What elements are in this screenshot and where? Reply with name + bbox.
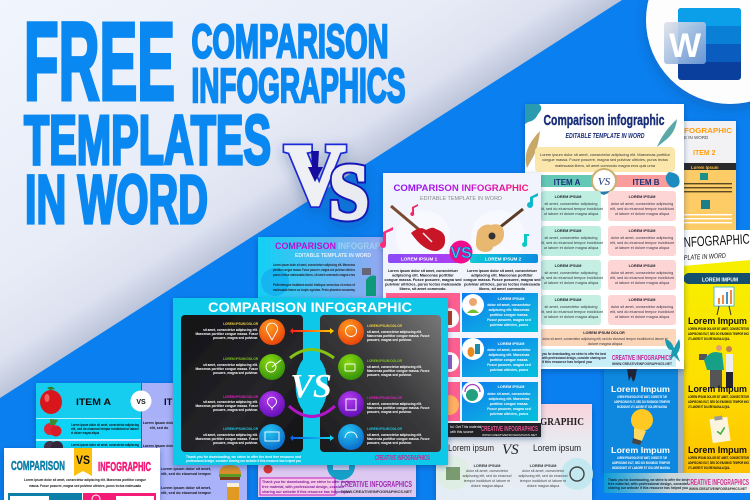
panel: cyan-purple template behind main card: Pellentesque habitant morbi tristique senectus et netus et (273, 283, 356, 287)
panel: white comparison infographic bottom-left: massa. Fusce posuere, magna sed pulvinar ultricies, purus lectus malesuada (29, 483, 142, 488)
right column text: posuere, magna sed pulvinar. (367, 441, 412, 445)
panel: item A versus item B table: elit, sed do eiusmod tempor incididunt ut labore (71, 427, 139, 431)
panel: pink VS template: Lorem ipsum (533, 443, 581, 453)
panel: orange item 2 template: E IN WORD (684, 135, 709, 140)
right column text: LOREM IPSUM DOLOR (367, 324, 403, 328)
icon: teal branch (657, 119, 677, 147)
panel: word document template with floral decoration: LOREM IPSUM (555, 229, 581, 233)
icon: guitars (462, 338, 484, 360)
left column text (195, 322, 259, 445)
panel: guitar comparison template: COMPARISON INFOGRAPHIC (394, 183, 529, 194)
text box: intro: congue massa. Fusce posuere, magna sed pulvinar ultricies, purus lectus (542, 157, 668, 162)
title: FREE COMPARISON INFOGRAPHICS TEMPLATES IN WORD: FREE (24, 0, 175, 124)
panel: guitar comparison template: pulvinar ultricies, purus lectus malesuada (464, 282, 541, 286)
panel: cyan-purple template behind main card: purus lectus malesuada libero, sit amet commodo magna eros (273, 273, 355, 277)
icon: strawberries (44, 419, 62, 436)
panel: word document template with floral decoration: LOREM IPSUM (555, 298, 581, 302)
panel: pink VS template: VS (502, 442, 519, 458)
footer: card note and logo: CREATIVE INFOGRAPHICS (375, 453, 430, 462)
icon: music notes (380, 193, 538, 248)
panel: yellow template: Lorem Impum (688, 316, 747, 326)
icons: right circles (338, 319, 364, 450)
title: FREE COMPARISON INFOGRAPHICS TEMPLATES IN WORD (24, 0, 406, 238)
footer: logo strip: CREATIVE INFOGRAPHICS (612, 353, 672, 362)
text box: peach footer: LOREM IPSUM DOLOR (583, 331, 625, 335)
icon: burger (219, 465, 241, 480)
panel: guitar comparison template: LOREM IPSUM (498, 297, 524, 301)
panel: guitar comparison template: Fusce posuere, magna sed (487, 318, 531, 322)
panel: guitar comparison template: adipiscing elit. Maecenas (489, 308, 529, 312)
footer: logo strip: with professional design, consider sharing our (541, 356, 607, 360)
panel: main black comparison card (173, 298, 448, 465)
right column text (367, 324, 430, 445)
title: FREE COMPARISON INFOGRAPHICS TEMPLATES IN WORD: COMPARISON (192, 14, 388, 68)
panel: word document template with floral decoration: ut labore et dolore magna aliqua (544, 212, 599, 216)
title: FREE COMPARISON INFOGRAPHICS TEMPLATES IN WORD: TEMPLATES (24, 101, 271, 179)
panel: word document template with floral decoration: elit, sed do eiusmod tempor incididunt (610, 276, 675, 280)
panel: word document template with floral decoration: ut labore et dolore magna aliqua (615, 281, 670, 285)
panel: word document template with floral decoration: Comparison infographic (544, 112, 664, 129)
panel: item A versus item B table: IT (164, 397, 173, 408)
panel: guitar comparison template: Lorem ipsum dolor sit amet, consectetuer (388, 269, 458, 273)
panel: blue template: Lorem Impum (611, 385, 670, 394)
left column text: LOREM IPSUM DOLOR (223, 427, 259, 431)
panel: item A versus item B table (36, 383, 247, 500)
panel: word document template with floral decoration: ut labore et dolore magna aliqua (544, 281, 599, 285)
panel: word document template with floral decoration: elit, sed do eiusmod tempor incididunt (610, 241, 675, 245)
arrow: top double arrow (290, 328, 334, 334)
panel: blue template: LOREM IPSUM DOLOR SIT AMET, CONSECTE TUR (617, 395, 667, 399)
panel: word document template with floral decoration: dolor sit amet, consectetur adipiscing (611, 305, 673, 309)
panel: item A versus item B table: ITEM A (76, 397, 111, 408)
panel: pink VS template: LOREM IPSUM (474, 464, 500, 468)
left column text: sit amet, consectetur adipiscing elit. (203, 433, 258, 437)
icons: left circles (259, 319, 285, 450)
panel: yellow template (683, 230, 750, 475)
panel: guitar comparison template: EDITABLE TEMPLATE IN WORD (420, 196, 502, 202)
left column text: posuere, magna sed pulvinar. (213, 441, 258, 445)
panel: cyan-purple template behind main card: sharing our website if this resource has helped you (262, 490, 350, 494)
panel: pink VS template (436, 404, 593, 500)
panel: item A versus item B table: elit, sed do (150, 426, 169, 430)
icon: Microsoft Word logo (664, 8, 741, 80)
panel: guitar comparison template: porttitor congue massa. (490, 402, 528, 406)
panel: word document template with floral decoration: sit amet, consectetur adipiscing (545, 202, 597, 206)
arc: purple (289, 406, 335, 416)
panel: word document template with floral decoration: elit, sed do eiusmod tempor incididunt (539, 310, 604, 314)
footer: card note and logo (186, 453, 430, 463)
footer: black logo strip (448, 423, 541, 437)
panel: guitar comparison template: adipiscing elit. Maecenas porttitor (392, 274, 454, 278)
panel: guitar comparison template: adipiscing elit. Maecenas (489, 353, 529, 357)
panel: guitar comparison template: LOREM IPSUM 2 (485, 256, 522, 262)
panel: pink VS template: adipiscing elit, sed do eiusmod (463, 474, 511, 478)
panel: cyan-purple template behind main card: Thank you for downloading, we strive to offer the best (262, 480, 355, 484)
left column text: Maecenas porttitor congue massa. Fusce (195, 437, 258, 441)
text box: intro (535, 147, 675, 172)
text box: peach footer: dolore magna aliqua (588, 342, 623, 346)
panel: guitar comparison template: adipiscing elit. Maecenas (489, 397, 529, 401)
panel: pink VS template: Lorem ipsum (448, 443, 494, 453)
panel: pink VS template: dolore magna aliqua (527, 484, 559, 488)
panel: pink VS template: dolore magna aliqua (471, 484, 503, 488)
left column text: sit amet, consectetur adipiscing elit. (203, 363, 258, 367)
icon: chart board (714, 287, 734, 315)
footer: black logo strip: WWW.CREATIVEINFOGRAPHICS.NET (482, 433, 537, 437)
icon: clipboard (709, 415, 731, 443)
panel: word document template with floral decoration: elit, sed do eiusmod tempor incididunt (610, 310, 675, 314)
right column text: LOREM IPSUM DOLOR (367, 427, 403, 431)
panel: pink VS template: tempor incididunt ut labore et (520, 479, 566, 483)
panel: word document template with floral decoration: sit amet, consectetur adipiscing (545, 305, 597, 309)
panel: cyan-purple template behind main card: porttitor congue massa. Fusce posuere, magna sed pulvinar ultricies (273, 268, 355, 272)
VS 3D emblem: V (285, 126, 345, 222)
panel: cyan-purple template behind main card: free material, with professional design, consider (262, 485, 345, 489)
text box: intro: malesuada libero, sit amet commodo magna eros quis urna (555, 163, 656, 168)
panel: orange item 2 template: ITEM 2 (693, 150, 716, 157)
panel: item A versus item B table: et dolore magna aliqua (71, 431, 100, 435)
panel: item A versus item B table: Lorem ipsum dolor sit amet, (161, 467, 211, 471)
panel: cyan-purple template behind main card: EDITABLE TEMPLATE IN WORD (295, 253, 371, 259)
panel: white comparison infographic bottom-left: Lorem ipsum dolor sit amet, consectetur adipiscing elit. Maecenas porttitor congue (24, 477, 147, 482)
VS 3D emblem: S (329, 148, 369, 235)
panel: word document template with floral decoration: LOREM IPSUM (629, 298, 655, 302)
footer: black logo strip: ful. Get This material (450, 425, 481, 429)
panel: pink VS template: GRAPHIC (540, 417, 584, 428)
right column text: LOREM IPSUM DOLOR (367, 359, 403, 363)
panel: word document template with floral decoration: elit, sed do eiusmod tempor incididunt (539, 241, 604, 245)
panel: guitar comparison template: congue massa. Fusce posuere, magna sed (384, 278, 462, 282)
VS 3D emblem: S (329, 148, 369, 235)
panel: word document template with floral decoration: dolor sit amet, consectetur adipiscing (611, 202, 673, 206)
right column text: sit amet, consectetur adipiscing elit. (367, 433, 422, 437)
panel: blue template: Lorem Impum (611, 446, 670, 455)
panel: item A versus item B table: elit, sed do eiusmod tempor (161, 491, 212, 495)
panel: word document template with floral decoration: sit amet, consectetur adipiscing (545, 271, 597, 275)
VS 3D emblem: V (285, 126, 345, 222)
panel: guitar comparison template: dolor sit amet, consectetur (487, 348, 531, 352)
right column text: sit amet, consectetur adipiscing elit. (367, 402, 422, 406)
panel: guitar comparison template: pulvinar ultricies, purus lectus malesuada (385, 282, 462, 286)
panel: guitar comparison template: congue massa. Fusce posuere, magna sed (463, 278, 541, 282)
panel: blue template: ADIPISCING ELIT, SED DO EIUSMOD TEMPOR (612, 461, 670, 465)
left column text: Maecenas porttitor congue massa. Fusce (195, 404, 258, 408)
footer: card note and logo: professional design, consider sharing our website if this resource has helped you (186, 459, 301, 463)
right column text: posuere, magna sed pulvinar. (367, 373, 412, 377)
right column text: Maecenas porttitor congue massa. Fusce (367, 406, 430, 410)
panel: guitar comparison template: LOREM IPSUM 1 (401, 256, 438, 262)
VS 3D emblem (285, 126, 369, 235)
panel: item A versus item B table: Lorem ipsum dolor (143, 421, 176, 425)
panel: cyan-purple template behind main card: Lorem ipsum dolor sit amet, consectetuer adipiscing elit. Maecenas (273, 263, 355, 267)
left column text: LOREM IPSUM DOLOR (223, 322, 259, 326)
icon: gold leaf (526, 131, 540, 168)
panel: word document template with floral decoration: LOREM IPSUM (629, 264, 655, 268)
panel: blue template: LOREM IPSUM DOLOR SIT AMET, CONSECTE TUR (617, 456, 667, 460)
badge: VS: VS (136, 399, 146, 406)
icon: two people (699, 345, 733, 388)
footer strip: blue and yellow templates: free material, with professional design, consider (608, 482, 689, 486)
heading: main card: COMPARISON INFOGRAPHIC (208, 299, 412, 315)
left column text: posuere, magna sed pulvinar. (213, 371, 258, 375)
panel: white comparison infographic bottom-left (4, 448, 160, 500)
left column text: Maecenas porttitor congue massa. Fusce (195, 367, 258, 371)
right column text: LOREM IPSUM DOLOR (367, 396, 403, 400)
panel: pink VS template: dolor sit amet, consectetur (522, 469, 565, 473)
icon: Microsoft Word logo: W (669, 27, 702, 65)
panel: guitar comparison template: dolor sit amet, consectetur (487, 303, 531, 307)
badge: floral VS: VS (598, 176, 611, 188)
panel: word document template with floral decoration: elit, sed do eiusmod tempor incididunt (539, 276, 604, 280)
badge: VS (450, 240, 472, 264)
panel: cyan-purple template behind main card: malesuada fames ac turpis egestas. Proin pharetra nonummy (273, 288, 355, 292)
right column text: Maecenas porttitor congue massa. Fusce (367, 437, 430, 441)
panel: guitar comparison template (380, 173, 541, 437)
panel: orange item 2 template (680, 121, 736, 236)
panel: yellow template: Lorem Impum (688, 384, 747, 394)
icon: teal flower top-left (525, 104, 541, 124)
panel: word document template with floral decoration: ut labore et dolore magna aliqua (615, 246, 670, 250)
panel: guitar comparison template: pulvinar ultricies, purus (490, 368, 528, 372)
panel: guitar comparison template: Lorem ipsum dolor sit amet, consectetuer (467, 269, 537, 273)
arc: green (290, 350, 334, 358)
text box: peach footer (541, 329, 676, 346)
panel: cyan-purple template behind main card: CREATIVE INFOGRAPHICS (341, 479, 412, 489)
panel: guitar comparison template: porttitor congue massa. (490, 358, 528, 362)
footer: logo strip (541, 349, 676, 367)
panel: yellow template: PLATE IN WORD (684, 253, 726, 262)
title: FREE COMPARISON INFOGRAPHICS TEMPLATES IN WORD: INFOGRAPHICS (192, 60, 406, 113)
panel: orange item 2 template: Lorem Ipsum (691, 165, 719, 170)
icon: acoustic guitar (476, 209, 523, 252)
panel: word document template with floral decoration: ut labore et dolore magna aliqua (615, 212, 670, 216)
text box: peach footer: dolor sit amet, consectetur adipiscing elit, sed do eiusmod tempor incididunt ut labore et (542, 337, 668, 341)
panel: yellow template: LOREM IMPUM (702, 278, 738, 284)
right column text: posuere, magna sed pulvinar. (367, 338, 412, 342)
panel: pink VS template: tempor incididunt ut labore et (464, 479, 510, 483)
icon: white circle behind Word logo (646, 0, 750, 104)
footer strip: blue and yellow templates: WWW.CREATIVEINFOGRAPHICS.NET (689, 487, 748, 491)
panel: word document template with floral decoration: LOREM IPSUM (629, 229, 655, 233)
panel: blue template: ADIPISCING ELIT, SED DO EIUSMOD TEMPOR (614, 400, 670, 404)
icon: electric guitar (391, 206, 445, 251)
panel: guitar comparison template: porttitor congue massa. (490, 313, 528, 317)
panel: word document template with floral decoration (525, 104, 684, 369)
icon: light bulb (631, 409, 653, 445)
panel: white comparison infographic bottom-left: COMPARISON (11, 458, 65, 473)
left column text: LOREM IPSUM DOLOR (223, 357, 259, 361)
panel: item A versus item B table: Lorem ipsum dolor (143, 444, 176, 448)
panel: word document template with floral decoration: ut labore et dolore magna aliqua (544, 315, 599, 319)
panel: pink VS template: dolor sit amet, consectetur (466, 469, 509, 473)
panel: blue template: INCIDIDUNT UT LABORE ET DOLORE MAGNA (617, 405, 667, 409)
panel: guitar comparison template: dolor sit amet, consectetur (487, 392, 531, 396)
label: script VS: VS (290, 368, 332, 405)
icon: blue flower (666, 172, 680, 188)
footer strip: blue and yellow templates: sharing our website if this resource has helped you (608, 486, 688, 490)
panel: cyan-purple template behind main card (258, 237, 416, 497)
panel: white comparison infographic bottom-left: INFOGRAPHIC (98, 459, 151, 474)
footer: card note and logo: Thank you for downloading, we strive to offer the best free resource and (186, 455, 301, 459)
footer: logo strip: you for downloading, we strive to offer the best (542, 352, 607, 356)
panel: guitar comparison template: adipiscing elit. Maecenas porttitor (471, 274, 533, 278)
background: light diagonal panel (0, 0, 622, 398)
panel: guitar comparison template: libero, sit amet commodo. (399, 287, 447, 291)
footer strip: blue and yellow templates (604, 473, 750, 493)
badge: VS ribbon (74, 448, 92, 476)
panel: pink VS template: LOREM IPSUM (530, 464, 556, 468)
panel: cyan-purple template behind main card: INFOGRAPH (338, 241, 386, 252)
footer: black logo strip: CREATIVE INFOGRAPHICS (481, 424, 538, 433)
panel: orange item 2 template: FOGRAPHIC (684, 128, 732, 135)
footer strip: blue and yellow templates: Thank you for downloading, we strive to offer the best (608, 478, 689, 482)
panel: blue template (604, 360, 683, 474)
panel: guitar comparison template: LOREM IPSUM (498, 342, 524, 346)
badge: floral VS (592, 169, 616, 195)
footer: logo strip: WWW.CREATIVEINFOGRAPHICS.NET (612, 362, 673, 366)
panel: yellow template: Lorem Impum (688, 445, 747, 455)
panel: item A versus item B table: Lorem ipsum dolor sit amet, consectetur adipiscing (71, 443, 139, 447)
panel: word document template with floral decoration: dolor sit amet, consectetur adipiscing (611, 236, 673, 240)
left column text: posuere, magna sed pulvinar. (213, 408, 258, 412)
panel: word document template with floral decoration: ut labore et dolore magna aliqua (544, 246, 599, 250)
badge: VS (130, 390, 152, 412)
title: FREE COMPARISON INFOGRAPHICS TEMPLATES IN WORD: IN WORD (25, 161, 208, 238)
panel: word document template with floral decoration: elit, sed do eiusmod tempor incididunt (610, 207, 675, 211)
panel: guitar comparison template: pulvinar ultricies, purus (490, 412, 528, 416)
footer: black logo strip: with this source (450, 430, 473, 434)
panel: blue template: INCIDIDUNT UT LABORE ET DOLORE MAGNA (612, 466, 670, 470)
icon: figure legs (627, 369, 637, 382)
right column text: Maecenas porttitor congue massa. Fusce (367, 334, 430, 338)
panel: guitar comparison template: Fusce posuere, magna sed (487, 407, 531, 411)
panel: word document template with floral decoration: dolor sit amet, consectetur adipiscing (611, 271, 673, 275)
panel: guitar comparison template: LOREM IPSUM (498, 385, 524, 389)
icon: globe headphones (462, 381, 484, 403)
footer: logo strip: if this resource has helped you (542, 360, 592, 364)
panel: guitar comparison template: pulvinar ultricies, purus (490, 323, 528, 327)
panel: word document template with floral decoration: ITEM A (554, 178, 581, 187)
left column text: sit amet, consectetur adipiscing elit. (203, 328, 258, 332)
panel: word document template with floral decoration: EDITABLE TEMPLATE IN WORD (566, 133, 644, 140)
icon: blue palm leaf (665, 339, 680, 362)
panel: cyan-purple template behind main card: COMPARISON (275, 241, 336, 252)
right column text: posuere, magna sed pulvinar. (367, 410, 412, 414)
left column text: posuere, magna sed pulvinar. (213, 336, 258, 340)
icon: apple (40, 387, 62, 414)
panel: guitar comparison template: Fusce posuere, magna sed (487, 363, 531, 367)
panel: word document template with floral decoration: LOREM IPSUM (555, 195, 581, 199)
right column text: sit amet, consectetur adipiscing elit. (367, 330, 422, 334)
panel: word document template with floral decoration: ut labore et dolore magna aliqua (615, 315, 670, 319)
panel: word document template with floral decoration: sit amet, consectetur adipiscing (545, 236, 597, 240)
left column text: Maecenas porttitor congue massa. Fusce (195, 332, 258, 336)
panel: cyan-purple template behind main card: WWW.CREATIVEINFOGRAPHICS.NET (341, 489, 413, 494)
right column text: sit amet, consectetur adipiscing elit. (367, 365, 422, 369)
panel: pink VS template: adipiscing elit, sed do eiusmod (519, 474, 567, 478)
left column text: LOREM IPSUM DOLOR (223, 395, 259, 399)
VS cyan blob (296, 355, 328, 415)
icon: person at laptop (362, 268, 376, 296)
panel: word document template with floral decoration: LOREM IPSUM (555, 264, 581, 268)
icon: beer (227, 483, 239, 500)
text box: intro: Lorem ipsum dolor sit amet, consectetur adipiscing elit. Maecenas porttitor (540, 152, 671, 157)
panel: item A versus item B table: elit, sed do eiusmod tempor (161, 472, 212, 476)
badge: VS: VS (450, 245, 472, 262)
right column text: Maecenas porttitor congue massa. Fusce (367, 369, 430, 373)
panel: guitar comparison template: libero, sit amet commodo (479, 287, 526, 291)
panel: word document template with floral decoration: elit, sed do eiusmod tempor incididunt (539, 207, 604, 211)
panel: item A versus item B table: Lorem ipsum dolor sit amet, (161, 486, 211, 490)
panel: word document template with floral decoration: ITEM B (632, 178, 660, 187)
badge: VS ribbon: VS (76, 453, 90, 467)
panel: item A versus item B table: Lorem ipsum dolor sit amet, consectetur adipiscing (71, 423, 139, 427)
arrow: bottom double arrow (290, 435, 334, 441)
panel: word document template with floral decoration: LOREM IPSUM (629, 195, 655, 199)
icon: person with headphones (462, 294, 484, 316)
left column text: sit amet, consectetur adipiscing elit. (203, 400, 258, 404)
